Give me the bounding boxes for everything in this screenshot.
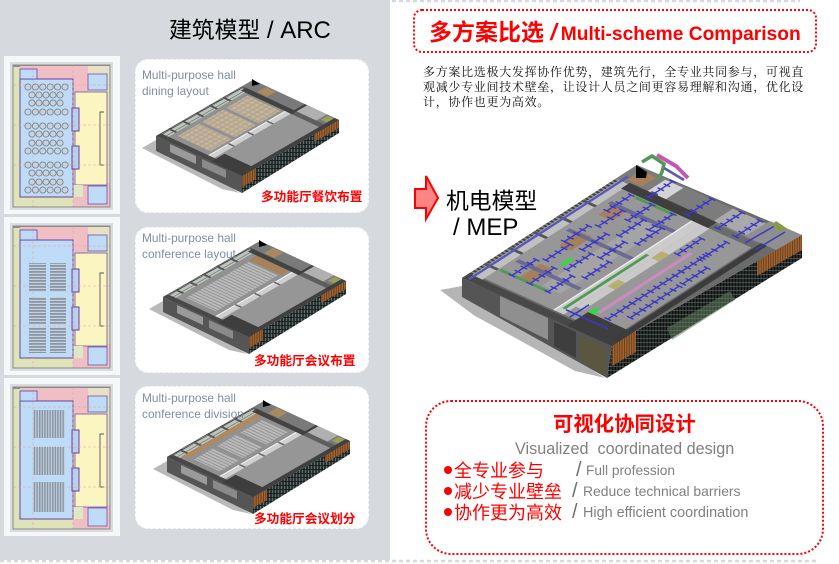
bullet	[444, 508, 452, 516]
Chinese text: 减少专业壁垒	[454, 482, 562, 502]
caption: conference division: Multi-purpose hall	[142, 391, 236, 405]
shadow	[440, 286, 605, 378]
floor plan: dining layout	[4, 56, 120, 214]
floor plan: conference division	[4, 378, 120, 536]
roof base	[462, 165, 802, 345]
left wall	[462, 278, 612, 378]
building model: division	[153, 400, 350, 514]
slash: /	[576, 459, 582, 481]
dark walls	[621, 183, 717, 228]
blue branch runs	[491, 174, 775, 335]
black flag	[636, 165, 647, 178]
building model: dining	[142, 79, 339, 193]
English: Reduce technical barriers	[583, 483, 741, 499]
building model: conference	[149, 240, 346, 354]
green ducts	[491, 190, 698, 309]
caption: conference division: conference division	[142, 406, 244, 420]
list item: high efficient coordination	[444, 501, 748, 523]
caption: dining layout	[142, 68, 236, 98]
English: High efficient coordination	[583, 505, 748, 521]
intro paragraph: 观减少专业间技术壁垒，让设计人员之间更容易理解和沟通，优化设	[423, 80, 804, 94]
Chinese text: 全专业参与	[454, 461, 544, 481]
list item: full profession	[444, 459, 675, 481]
caption: conference layout	[142, 231, 236, 260]
callout box: visualized coordinated design	[425, 400, 824, 555]
heading: ARC: 建筑模型 / ARC	[169, 17, 331, 44]
caption: conference layout: conference layout	[142, 246, 236, 260]
list item: reduce barriers	[444, 480, 741, 502]
caption: dining layout: dining layout	[142, 84, 209, 98]
panel: architecture model background	[0, 0, 390, 560]
callout title: 可视化协同设计	[553, 414, 696, 436]
floor plan: conference layout	[4, 217, 120, 375]
slash: /	[572, 501, 578, 523]
grey ducts	[515, 201, 676, 292]
heading: MEP: / MEP	[453, 214, 518, 241]
magenta duct	[597, 252, 693, 314]
Chinese text: 协作更为高效	[454, 503, 562, 523]
label: conference division Chinese: 多功能厅会议划分	[254, 512, 356, 526]
intro paragraph: 计，协作也更为高效。	[423, 95, 550, 109]
heading box: multi-scheme comparison	[413, 9, 817, 53]
label: dining layout Chinese: 多功能厅餐饮布置	[261, 190, 362, 204]
heading text: 多方案比选 /Multi-scheme Comparison	[429, 19, 801, 45]
slash: /	[572, 480, 578, 502]
card: dining layout	[135, 59, 369, 213]
card: conference layout	[135, 227, 369, 373]
divider wall	[553, 219, 704, 315]
callout subtitle: Visualized coordinated design	[515, 440, 734, 458]
back wall	[462, 179, 630, 284]
bullet	[444, 487, 452, 495]
heading: MEP	[446, 188, 537, 241]
front facade	[607, 235, 802, 378]
caption: dining layout: Multi-purpose hall	[142, 68, 236, 82]
rooftop ducts	[642, 156, 664, 180]
main blue riser	[469, 176, 628, 279]
caption: conference division	[142, 391, 244, 420]
English: Full profession	[586, 463, 675, 478]
intro paragraph	[423, 65, 804, 109]
service rooms	[616, 165, 787, 247]
heading: MEP: 机电模型	[446, 188, 537, 214]
lobby	[564, 225, 752, 337]
card: conference division	[135, 386, 369, 529]
caption: conference layout: Multi-purpose hall	[142, 231, 236, 245]
bullet	[444, 466, 452, 474]
label: conference layout Chinese: 多功能厅会议布置	[254, 354, 356, 368]
interior	[462, 165, 787, 346]
intro paragraph: 多方案比选极大发挥协作优势，建筑先行，全专业共同参与，可视直	[423, 65, 804, 79]
service corner details	[745, 221, 802, 250]
